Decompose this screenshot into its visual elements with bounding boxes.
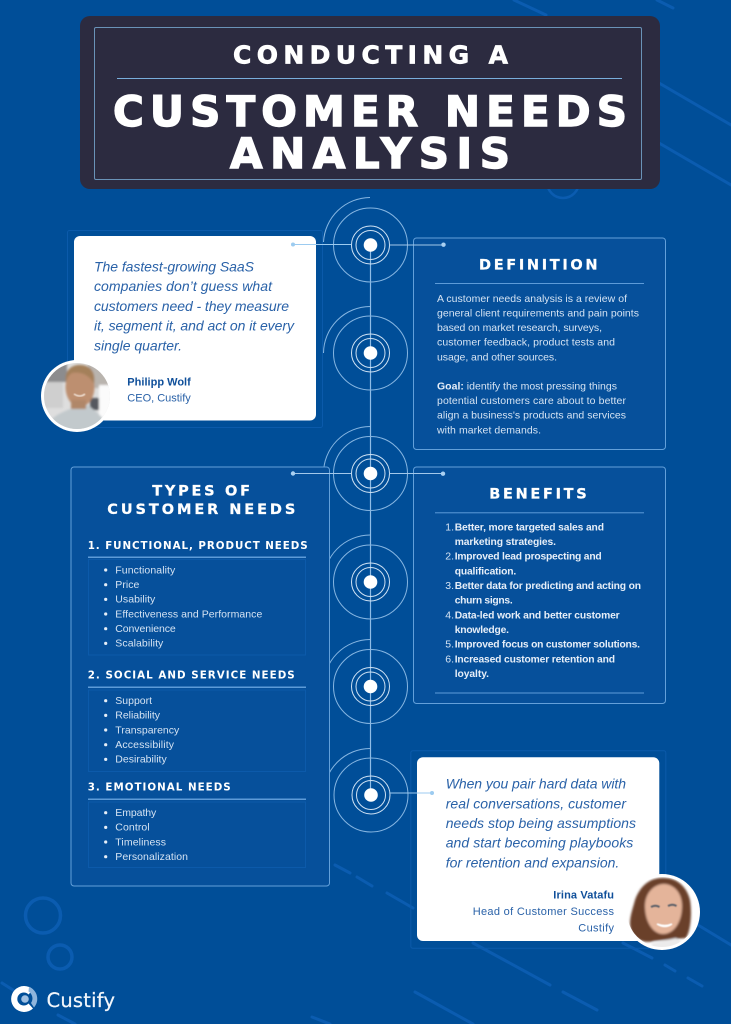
subsection: social and service needs <box>88 670 306 772</box>
heading: definition: DEFINITION <box>479 258 598 274</box>
benefits list: knowledge. <box>455 625 509 636</box>
benefits list: loyalty. <box>455 669 489 680</box>
heading: types of customer needs: CUSTOMER NEEDS <box>107 502 295 518</box>
benefits list: 2. <box>445 551 454 563</box>
attribution <box>127 376 191 404</box>
benefits list: 1. <box>445 521 454 533</box>
subsection: functional, product needs: Scalability <box>115 638 164 650</box>
quote text: it, segment it, and act on it every <box>94 318 295 334</box>
goal text <box>436 380 626 436</box>
subsection: emotional needs: Empathy <box>115 807 157 819</box>
benefits list: churn signs. <box>455 596 513 607</box>
subsection: social and service needs: Reliability <box>115 710 161 722</box>
title line: analysis: ANALYSIS <box>230 129 510 178</box>
subsection: functional, product needs: 1. FUNCTIONAL, PRODUCT NEEDS <box>88 540 308 552</box>
goal text: Goal: identify the most pressing things <box>437 380 617 392</box>
benefits list: Improved focus on customer solutions. <box>455 640 640 651</box>
title line: customer needs: CUSTOMER NEEDS <box>113 87 627 136</box>
benefits list <box>445 521 641 680</box>
connector: quote 1 to node 1 <box>291 242 352 246</box>
subsection: functional, product needs: Functionality <box>115 564 176 576</box>
node 1 <box>324 198 408 282</box>
benefits list: 4. <box>445 609 454 621</box>
subsection: emotional needs: Personalization <box>115 851 188 863</box>
quote text: customers need - they measure <box>94 298 289 314</box>
node 4 <box>324 535 408 619</box>
subsection: social and service needs: Accessibility <box>115 739 175 751</box>
attribution: Custify <box>578 922 614 934</box>
definition text: customer feedback, product tests and <box>437 337 615 349</box>
benefits list: Improved lead prospecting and <box>455 552 602 563</box>
benefits list: Better data for predicting and acting on <box>455 581 641 592</box>
node 2 <box>324 306 408 390</box>
quote text: real conversations, customer <box>446 795 627 811</box>
panel: types of customer needs <box>71 467 330 886</box>
subsection: social and service needs: Desirability <box>115 754 167 766</box>
definition text: A customer needs analysis is a review of <box>437 293 627 305</box>
connector: node 3 to benefits <box>390 472 445 476</box>
benefits list: Increased customer retention and <box>455 654 615 665</box>
subsection: social and service needs: Transparency <box>115 724 180 736</box>
avatar: Irina Vatafu <box>624 874 700 952</box>
goal text: with market demands. <box>436 424 541 436</box>
quote text: and start becoming playbooks <box>446 835 633 851</box>
quote text: companies don’t guess what <box>94 278 273 294</box>
quote text: When you pair hard data with <box>446 776 626 792</box>
benefits list: 3. <box>445 580 454 592</box>
attribution: Head of Customer Success <box>473 906 614 918</box>
panel: benefits <box>414 467 666 704</box>
avatar: Philipp Wolf <box>41 360 113 434</box>
subsection: emotional needs: 3. EMOTIONAL NEEDS <box>88 782 231 794</box>
connector: node 1 to definition <box>390 242 446 247</box>
benefits list: 5. <box>445 639 454 651</box>
definition text: general client requirements and pain points <box>437 308 639 320</box>
timeline spine with target nodes <box>324 198 408 832</box>
goal text: align a business's products and services <box>437 410 626 422</box>
title line: conducting a: CONDUCTING A <box>233 40 509 70</box>
subsection: functional, product needs: Usability <box>115 594 156 606</box>
connector: types to node 3 <box>291 471 352 476</box>
quote card: Irina Vatafu <box>411 751 700 952</box>
attribution: CEO, Custify <box>127 392 191 404</box>
quote text: The fastest-growing SaaS <box>94 258 255 274</box>
benefits list: qualification. <box>455 566 516 577</box>
subsection: social and service needs: 2. SOCIAL AND SERVICE NEEDS <box>88 670 295 682</box>
subsection: functional, product needs: Convenience <box>115 623 176 635</box>
node 6 <box>324 748 408 832</box>
benefits list: Data-led work and better customer <box>455 610 620 621</box>
panel: definition <box>414 238 666 450</box>
goal text: potential customers care about to better <box>437 395 626 407</box>
attribution <box>473 890 614 934</box>
heading: benefits: BENEFITS <box>489 486 587 502</box>
attribution: Philipp Wolf <box>127 376 191 388</box>
node 5 <box>324 640 408 724</box>
heading: types of customer needs <box>107 484 295 518</box>
quote card: Philipp Wolf <box>41 230 322 434</box>
subsection: social and service needs: Support <box>115 695 152 707</box>
heading: types of customer needs: TYPES OF <box>152 484 250 500</box>
node 3 <box>324 426 408 510</box>
subsection: emotional needs: Timeliness <box>115 836 166 848</box>
icon: Custify mark <box>11 986 37 1012</box>
subsection: functional, product needs: Price <box>115 579 139 591</box>
logo: Custify <box>11 986 115 1012</box>
subsection: functional, product needs: Effectiveness and Performance <box>115 608 262 620</box>
definition text: usage, and other sources. <box>437 351 557 363</box>
quote text: for retention and expansion. <box>446 854 619 870</box>
definition text: based on market research, surveys, <box>437 322 602 334</box>
benefits list: Better, more targeted sales and <box>455 522 604 533</box>
benefits list: 6. <box>445 653 454 665</box>
title banner <box>80 16 660 189</box>
quote text: single quarter. <box>94 338 182 354</box>
attribution: Irina Vatafu <box>553 890 614 902</box>
benefits list: marketing strategies. <box>455 537 556 548</box>
wordmark: Custify <box>46 989 115 1012</box>
subsection: emotional needs: Control <box>115 822 150 834</box>
quote text: needs stop being assumptions <box>446 815 636 831</box>
connector: node 6 to quote 2 <box>390 791 434 795</box>
subsection: emotional needs <box>88 782 306 868</box>
subsection: functional, product needs <box>88 540 308 655</box>
quote text <box>94 258 295 354</box>
quote text <box>446 776 636 870</box>
definition text <box>437 293 639 363</box>
